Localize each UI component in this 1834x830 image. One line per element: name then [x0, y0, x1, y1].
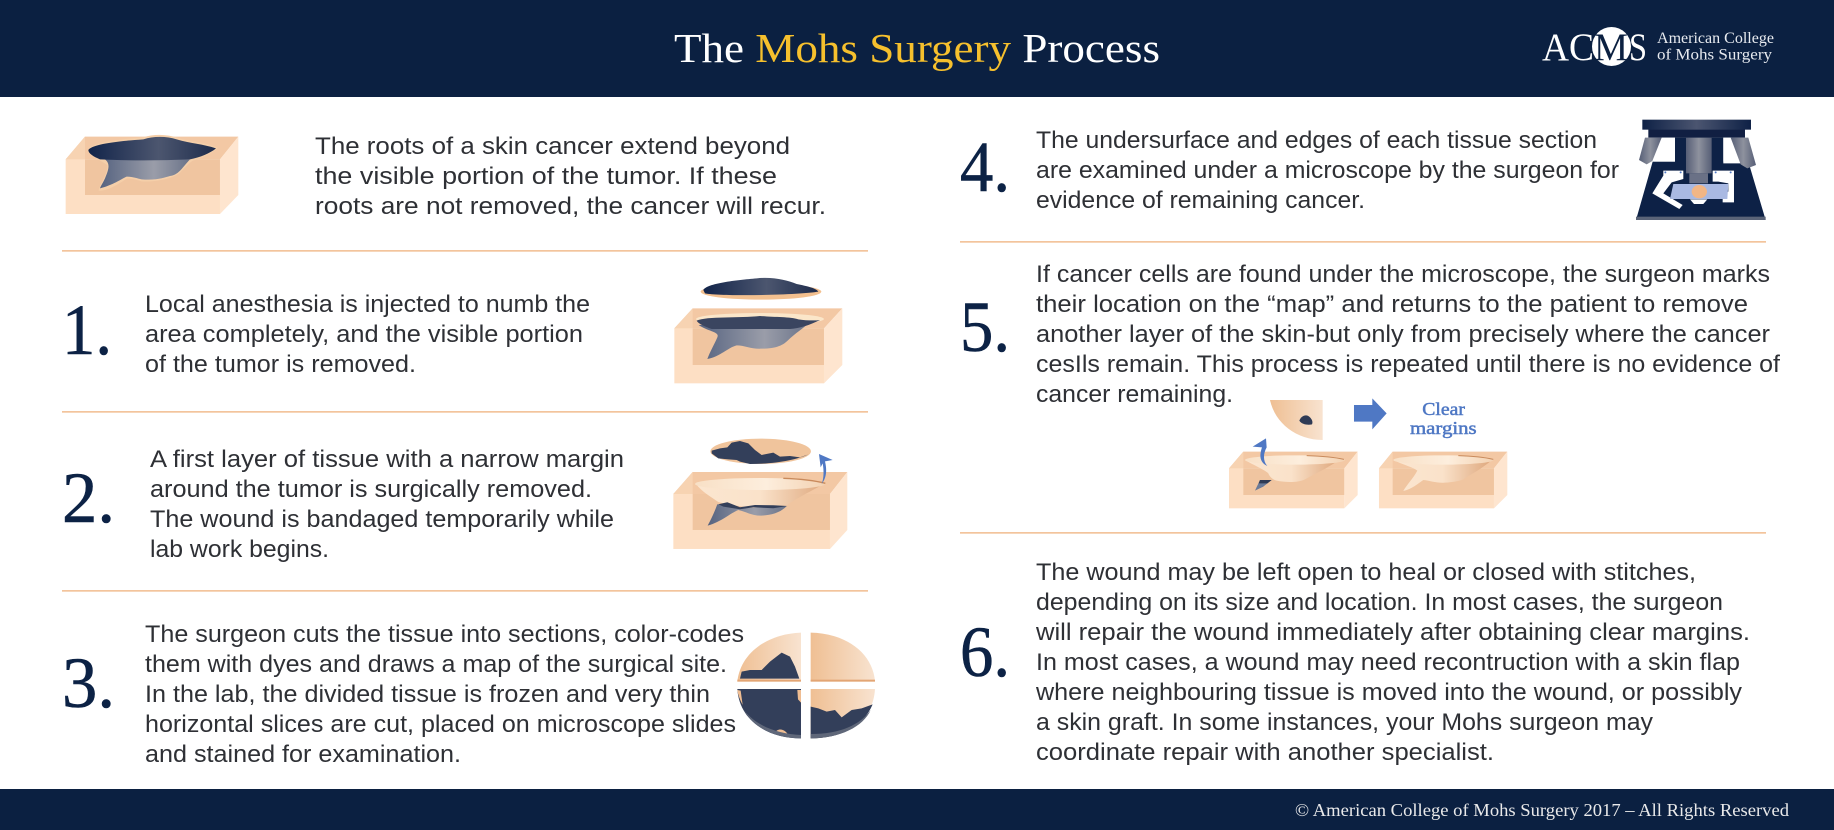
step number 1: 1. — [62, 290, 112, 370]
step 6 text: depending on its size and location. In most cases, the surgeon — [1036, 589, 1723, 616]
divider — [960, 241, 1766, 243]
logo: American College of Mohs Surgery: AC — [1542, 26, 1594, 69]
step 5 text — [1036, 261, 1780, 408]
step number 6: 6. — [960, 612, 1010, 692]
step 3 text: them with dyes and draws a map of the surgical site. — [145, 651, 727, 678]
step 6 text: where neighbouring tissue is moved into the wound, or possibly — [1035, 679, 1742, 706]
logo: American College of Mohs Surgery: of Mohs Surgery — [1657, 46, 1772, 64]
label: clear margins — [1410, 399, 1477, 438]
step 5 text: cancer remaining. — [1036, 381, 1233, 408]
description text: the visible portion of the tumor. If these — [315, 163, 777, 190]
footer band — [0, 789, 1834, 830]
step 6 text: In most cases, a wound may need recontruction with a skin flap — [1036, 649, 1740, 676]
step 3 text: The surgeon cuts the tissue into sections, color-codes — [145, 621, 744, 648]
step number 2: 2. — [62, 458, 115, 538]
step number 3: 3. — [62, 643, 115, 723]
icon: repeated layer removal until clear margins — [1229, 398, 1507, 508]
logo: American College of Mohs Surgery: M — [1594, 26, 1628, 69]
icon: skin block with remaining cancer — [1229, 438, 1358, 508]
icon: first tissue layer lifted from wound — [673, 439, 847, 549]
divider — [62, 411, 868, 413]
step 4 text: evidence of remaining cancer. — [1036, 187, 1365, 214]
logo: American College of Mohs Surgery: American College — [1657, 30, 1774, 47]
header band — [0, 0, 1834, 97]
copyright: © American College of Mohs Surgery 2017 – All Rights Reserved — [1295, 800, 1789, 820]
divider — [960, 532, 1766, 534]
description text — [315, 133, 826, 220]
step 5 text: another layer of the skin-but only from precisely where the cancer — [1036, 321, 1770, 348]
step number 5: 5. — [960, 287, 1010, 367]
icon: skin block with tumor — [66, 135, 238, 214]
icon: mapped tissue quarter — [1270, 400, 1323, 440]
step 2 text — [150, 446, 624, 563]
step 1 text: of the tumor is removed. — [145, 351, 416, 378]
label: clear margins: Clear — [1422, 399, 1465, 419]
step 2 text: around the tumor is surgically removed. — [150, 476, 592, 503]
step 6 text: The wound may be left open to heal or closed with stitches, — [1036, 559, 1696, 586]
panel: step 4 — [960, 120, 1766, 220]
title: The Mohs Surgery Process — [674, 25, 1160, 71]
step 1 text: Local anesthesia is injected to numb the — [145, 291, 590, 318]
logo: American College of Mohs Surgery: S — [1629, 26, 1647, 69]
panel: step 6 — [960, 559, 1750, 766]
step 5 text: cesIls remain. This process is repeated until there is no evidence of — [1036, 351, 1780, 378]
step 3 text: horizontal slices are cut, placed on microscope slides — [145, 711, 736, 738]
icon: tumor removed from skin block — [674, 278, 842, 383]
step 6 text: a skin graft. In some instances, your Mohs surgeon may — [1036, 709, 1653, 736]
icon: tissue divided into four sections — [737, 633, 875, 738]
step 1 text — [145, 291, 590, 378]
panel: step 5 — [960, 261, 1780, 508]
description text: roots are not removed, the cancer will recur. — [315, 193, 826, 220]
step 4 text: The undersurface and edges of each tissue section — [1036, 127, 1597, 154]
step 3 text: and stained for examination. — [145, 741, 461, 768]
step 3 text: In the lab, the divided tissue is frozen and very thin — [145, 681, 710, 708]
step 5 text: their location on the “map” and returns to the patient to remove — [1036, 291, 1748, 318]
step number 4: 4. — [960, 127, 1010, 207]
step 3 text — [145, 621, 744, 768]
divider — [62, 250, 868, 252]
logo: American College of Mohs Surgery — [1542, 26, 1774, 69]
step 5 text: If cancer cells are found under the microscope, the surgeon marks — [1036, 261, 1770, 288]
step 4 text — [1036, 127, 1619, 214]
step 1 text: area completely, and the visible portion — [145, 321, 583, 348]
step 2 text: lab work begins. — [150, 536, 329, 563]
step 2 text: A first layer of tissue with a narrow margin — [150, 446, 624, 473]
step 2 text: The wound is bandaged temporarily while — [150, 506, 614, 533]
icon: skin block with clear margins — [1379, 452, 1507, 508]
step 6 text: will repair the wound immediately after obtaining clear margins. — [1035, 619, 1750, 646]
step 4 text: are examined under a microscope by the surgeon for — [1036, 157, 1619, 184]
panel: step 1 — [62, 278, 842, 383]
panel: step 3 — [62, 621, 875, 768]
step 6 text — [1035, 559, 1750, 766]
description text: The roots of a skin cancer extend beyond — [315, 133, 790, 160]
divider — [62, 590, 868, 592]
panel: step 2 — [62, 439, 847, 563]
panel: introduction — [66, 133, 826, 220]
label: clear margins: margins — [1410, 418, 1477, 438]
step 6 text: coordinate repair with another specialist. — [1036, 739, 1494, 766]
arrow: to clear margins — [1354, 398, 1387, 429]
icon: microscope — [1636, 120, 1766, 220]
